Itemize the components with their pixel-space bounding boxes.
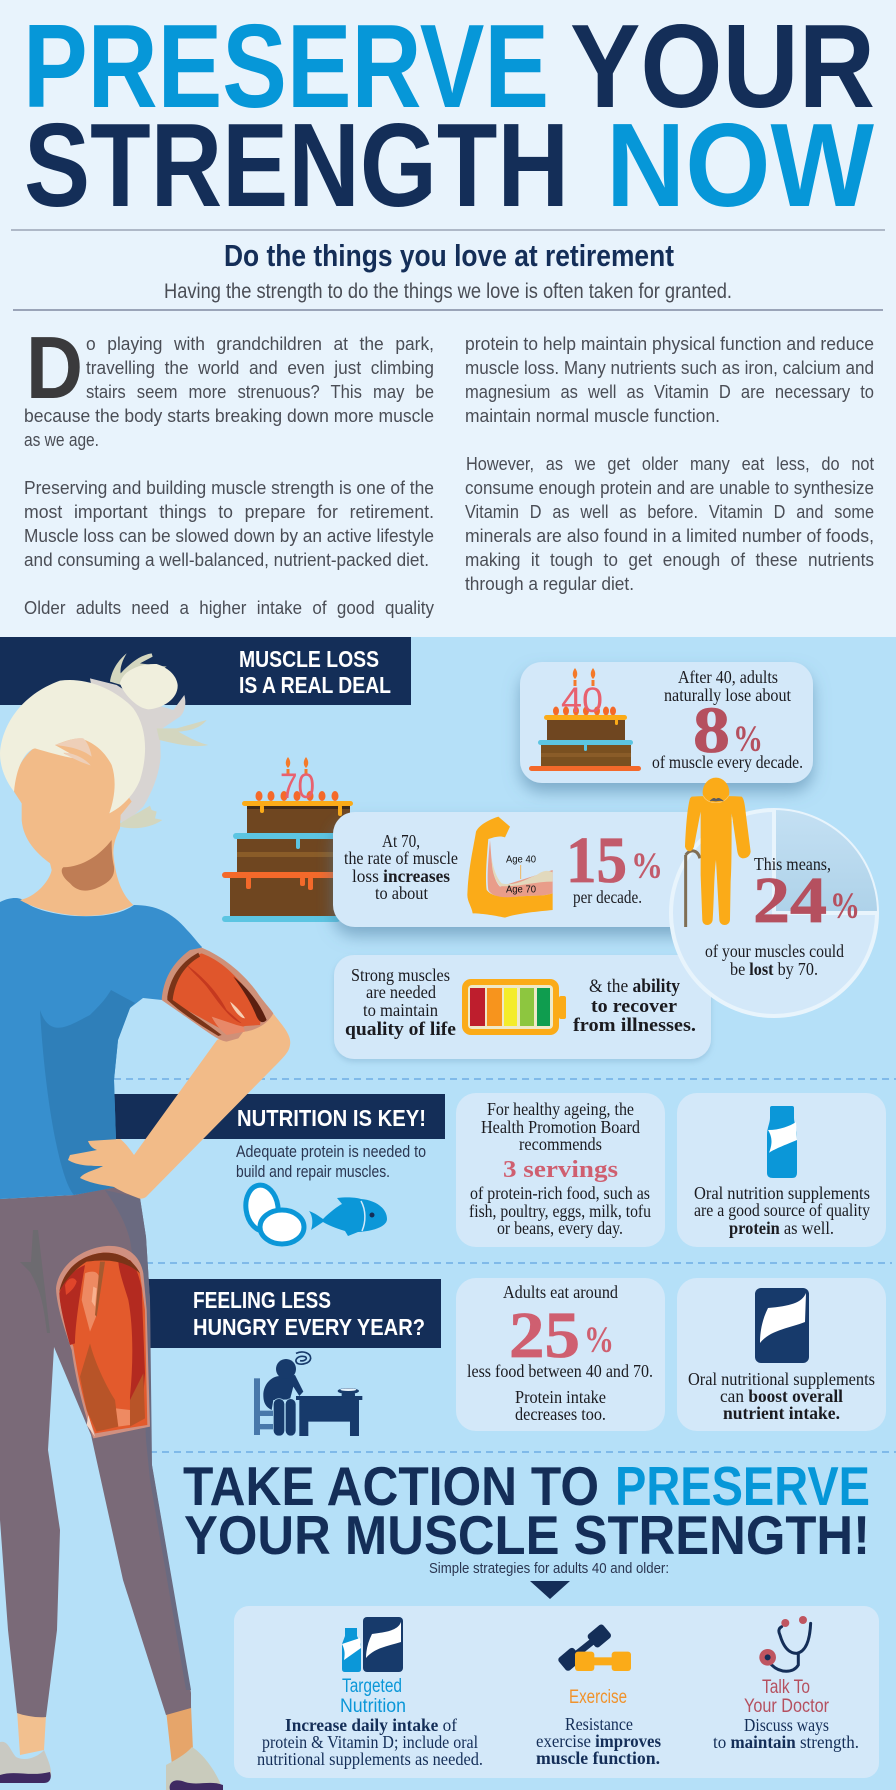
body text right column: minerals are also found in a limited number of foods, xyxy=(465,526,874,546)
icon: flexed arm: Age 40 xyxy=(506,855,536,866)
strategies caption: Simple strategies for adults 40 and older: xyxy=(429,1560,669,1577)
circle: 24% of muscles: be lost by 70. xyxy=(730,959,818,979)
strategy: targeted nutrition: Nutrition xyxy=(340,1696,406,1717)
drop cap: D xyxy=(26,318,83,417)
thigh muscle xyxy=(56,1246,150,1438)
title: STRENGTH xyxy=(24,99,569,232)
card: strong muscles: to recover xyxy=(591,997,677,1017)
card: 25% less food: less food between 40 and 70. xyxy=(467,1361,653,1381)
card: at 70: loss increases xyxy=(352,866,450,886)
card: at 70 xyxy=(333,812,733,927)
card: 3 servings xyxy=(456,1093,665,1247)
body text right column xyxy=(465,334,874,594)
banner: muscle loss xyxy=(0,637,411,705)
strategy: talk to your doctor: Talk To xyxy=(762,1677,810,1698)
strategy: targeted nutrition: Targeted xyxy=(342,1676,402,1697)
body text left column: travelling the world and even just climbing xyxy=(86,358,434,378)
stat: 25%: 25 xyxy=(509,1299,580,1372)
card: 3 servings: 3 servings xyxy=(503,1157,618,1183)
banner: nutrition is key xyxy=(114,1094,445,1139)
icon: bottle xyxy=(767,1106,797,1178)
stat: 8%: 8 xyxy=(693,694,730,767)
stat: 24% xyxy=(753,864,860,937)
icon: cake 40 xyxy=(529,668,641,771)
circle: 24% of muscles xyxy=(671,810,877,1016)
strategy: targeted nutrition: protein & Vitamin D; include oral xyxy=(262,1732,478,1752)
banner: feeling less hungry: FEELING LESS xyxy=(193,1287,331,1313)
card: at 70: At 70, xyxy=(382,831,420,851)
heading: take action: TAKE ACTION TO xyxy=(183,1455,599,1517)
icon: stethoscope xyxy=(759,1616,811,1671)
card: after 40: of muscle every decade. xyxy=(652,752,803,772)
heading: take action xyxy=(183,1455,870,1566)
subheading: Do the things you love at retirement xyxy=(224,238,674,273)
shirt xyxy=(0,898,202,1199)
strategy: exercise: Exercise xyxy=(569,1687,627,1708)
body text left column: Preserving and building muscle strength is one of the xyxy=(24,478,434,498)
strategy: targeted nutrition xyxy=(257,1676,483,1769)
icon: cake 70: 70 xyxy=(280,767,315,806)
stat: 15%: 15 xyxy=(566,824,627,897)
strategy: talk to your doctor xyxy=(713,1677,859,1752)
strategy: talk to your doctor: to maintain strength. xyxy=(713,1732,859,1752)
circle: 24% of muscles: of your muscles could xyxy=(705,941,844,961)
nutrition text: Adequate protein is needed to xyxy=(236,1143,426,1161)
card: after 40 xyxy=(520,662,813,783)
stat: 15% xyxy=(566,824,663,897)
stat: 24%: % xyxy=(830,886,860,927)
nutrition text xyxy=(236,1143,426,1181)
banner: muscle loss: MUSCLE LOSS xyxy=(239,646,379,672)
card: oral supplements bottle xyxy=(677,1093,886,1247)
strategy: targeted nutrition: Increase daily intake of xyxy=(285,1715,457,1735)
card: 3 servings: Health Promotion Board xyxy=(481,1117,640,1137)
card: 3 servings: fish, poultry, eggs, milk, tofu xyxy=(469,1201,651,1221)
icon: cake 40: 40 xyxy=(561,681,603,720)
banner: muscle loss: IS A REAL DEAL xyxy=(239,672,391,698)
card: oral supplements can: can boost overall xyxy=(720,1386,843,1406)
body text right column: protein to help maintain physical function and reduce xyxy=(465,334,874,354)
card: strong muscles: Strong muscles xyxy=(351,965,450,985)
card: 25% less food: Protein intake xyxy=(515,1387,606,1407)
strategy: talk to your doctor: Discuss ways xyxy=(744,1715,829,1735)
card: 25% less food: Adults eat around xyxy=(503,1282,618,1302)
banner: nutrition is key: NUTRITION IS KEY! xyxy=(237,1105,426,1131)
nutrition text: build and repair muscles. xyxy=(236,1163,390,1181)
icon: eggs and fish xyxy=(243,1183,387,1244)
strategy: exercise: Resistance xyxy=(565,1714,633,1734)
stat: 8% xyxy=(693,694,763,767)
card: oral supplements can xyxy=(677,1278,886,1431)
body text left column: Muscle loss can be slowed down by an active lifestyle xyxy=(24,526,434,546)
strategy: targeted nutrition: nutritional supplements as needed. xyxy=(257,1749,483,1769)
body text left column: and consuming a well-balanced, nutrient-packed diet. xyxy=(24,550,429,570)
card: 25% less food: decreases too. xyxy=(515,1404,606,1424)
pants xyxy=(0,1187,191,1717)
banner: feeling less hungry: HUNGRY EVERY YEAR? xyxy=(193,1314,425,1340)
body text left column: as we age. xyxy=(24,430,99,450)
card: 3 servings: or beans, every day. xyxy=(497,1218,623,1238)
stat: 25%: % xyxy=(584,1320,614,1361)
body text right column: maintain normal muscle function. xyxy=(465,406,720,426)
icon: battery xyxy=(462,979,566,1035)
card: 3 servings: of protein-rich food, such as xyxy=(470,1183,650,1203)
panel: strategies xyxy=(234,1606,879,1778)
banner: feeling less hungry xyxy=(146,1279,441,1348)
card: after 40: naturally lose about xyxy=(664,685,791,705)
card: strong muscles: & the ability xyxy=(589,977,681,997)
body text right column: muscle loss. Many nutrients such as iron, calcium and xyxy=(465,358,874,378)
card: at 70: the rate of muscle xyxy=(344,848,458,868)
card: at 70: per decade. xyxy=(573,887,642,907)
head xyxy=(0,653,208,916)
body text left column: Older adults need a higher intake of good quality xyxy=(24,598,434,618)
icon: bottle and can xyxy=(342,1617,403,1672)
title: NOW xyxy=(606,99,875,232)
card: 3 servings: recommends xyxy=(519,1134,602,1154)
icon: can xyxy=(755,1288,809,1363)
card: strong muscles: are needed xyxy=(366,982,436,1002)
body text right column: consume enough protein and are unable to synthesize xyxy=(465,478,874,498)
card: strong muscles xyxy=(334,955,711,1059)
card: strong muscles: to maintain xyxy=(363,1000,438,1020)
stat: 8%: % xyxy=(733,719,763,760)
card: strong muscles: from illnesses. xyxy=(573,1016,696,1036)
card: oral supplements bottle: are a good source of quality xyxy=(694,1200,870,1220)
body text left column xyxy=(24,334,434,618)
body text left column: because the body starts breaking down more muscle xyxy=(24,406,434,426)
intro line: Having the strength to do the things we love is often taken for granted. xyxy=(164,280,732,303)
illustration: woman xyxy=(0,653,290,1790)
card: oral supplements bottle: Oral nutrition supplements xyxy=(694,1183,870,1203)
title: PRESERVE xyxy=(23,0,549,133)
strategy: exercise xyxy=(536,1687,661,1768)
strategy: exercise: exercise improves xyxy=(536,1731,661,1751)
body text left column: most important things to prepare for retirement. xyxy=(24,502,434,522)
icon: cake 70 xyxy=(222,757,353,922)
icon: person at table xyxy=(254,1352,362,1436)
forearm and hand xyxy=(68,1012,290,1199)
stat: 25% xyxy=(509,1299,614,1372)
card: after 40: After 40, adults xyxy=(678,667,778,687)
strategy: exercise: muscle function. xyxy=(536,1748,660,1768)
body text right column: through a regular diet. xyxy=(465,574,634,594)
icon: elderly man with cane xyxy=(685,778,751,927)
card: oral supplements can: Oral nutritional supplements xyxy=(688,1369,875,1389)
card: 25% less food xyxy=(456,1278,665,1431)
body text right column: making it tough to get enough of these nutrients xyxy=(465,550,874,570)
card: oral supplements can: nutrient intake. xyxy=(723,1403,840,1423)
card: oral supplements bottle: protein as well. xyxy=(729,1218,834,1238)
feet and shoes xyxy=(0,1705,223,1790)
stat: 24%: 24 xyxy=(753,864,827,937)
title xyxy=(23,0,875,232)
card: 3 servings: For healthy ageing, the xyxy=(487,1099,634,1119)
stat: 15%: % xyxy=(631,846,663,887)
body text left column: o playing with grandchildren at the park, xyxy=(86,334,434,354)
icon: flexed arm: Age 70 xyxy=(506,884,536,895)
icon: dumbbells xyxy=(557,1623,631,1672)
icon: flexed arm xyxy=(467,817,553,918)
strategy: talk to your doctor: Your Doctor xyxy=(744,1696,830,1717)
circle: 24% of muscles: This means, xyxy=(754,854,831,874)
card: strong muscles: quality of life xyxy=(345,1020,456,1040)
arrow: pointing down xyxy=(530,1581,570,1599)
card: at 70: to about xyxy=(375,883,428,903)
arm muscle xyxy=(162,948,273,1042)
body text left column: stairs seem more strenuous? This may be xyxy=(86,382,434,402)
